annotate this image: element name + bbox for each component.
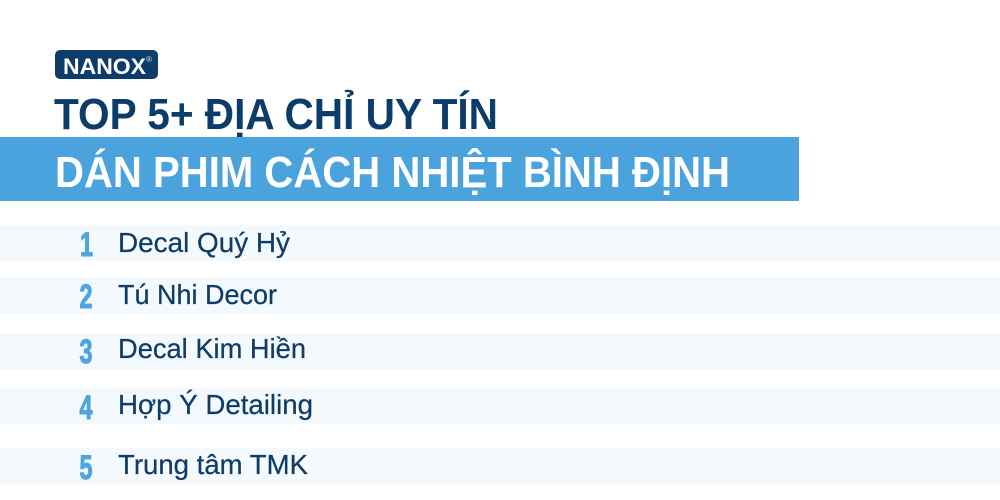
list item 4: 4	[80, 389, 93, 427]
heading banner: second title line: DÁN PHIM CÁCH NHIỆT BÌNH ĐỊNH	[55, 147, 730, 197]
list item 1	[0, 225, 1000, 264]
list item 2: 2	[80, 278, 92, 316]
list item 4: Hợp Ý Detailing	[118, 389, 313, 420]
list item 3: Decal Kim Hiền	[118, 333, 306, 364]
list item 2	[0, 277, 1000, 316]
list item 5	[0, 448, 1000, 487]
list item 4	[0, 388, 1000, 427]
list item 1: 1	[80, 226, 93, 264]
list item 5: 5	[80, 449, 92, 487]
logo: NanoX badge: NANOX	[63, 54, 146, 79]
list item 3	[0, 333, 1000, 371]
list item 1: Decal Quý Hỷ	[118, 227, 290, 258]
logo: NanoX badge: ®	[146, 55, 152, 64]
heading: first title line: TOP 5+ ĐỊA CHỈ UY TÍN	[54, 89, 498, 139]
list item 5: Trung tâm TMK	[118, 449, 308, 480]
logo: NanoX badge	[55, 50, 158, 79]
list item 2: Tú Nhi Decor	[118, 279, 277, 310]
list item 3: 3	[80, 333, 92, 371]
